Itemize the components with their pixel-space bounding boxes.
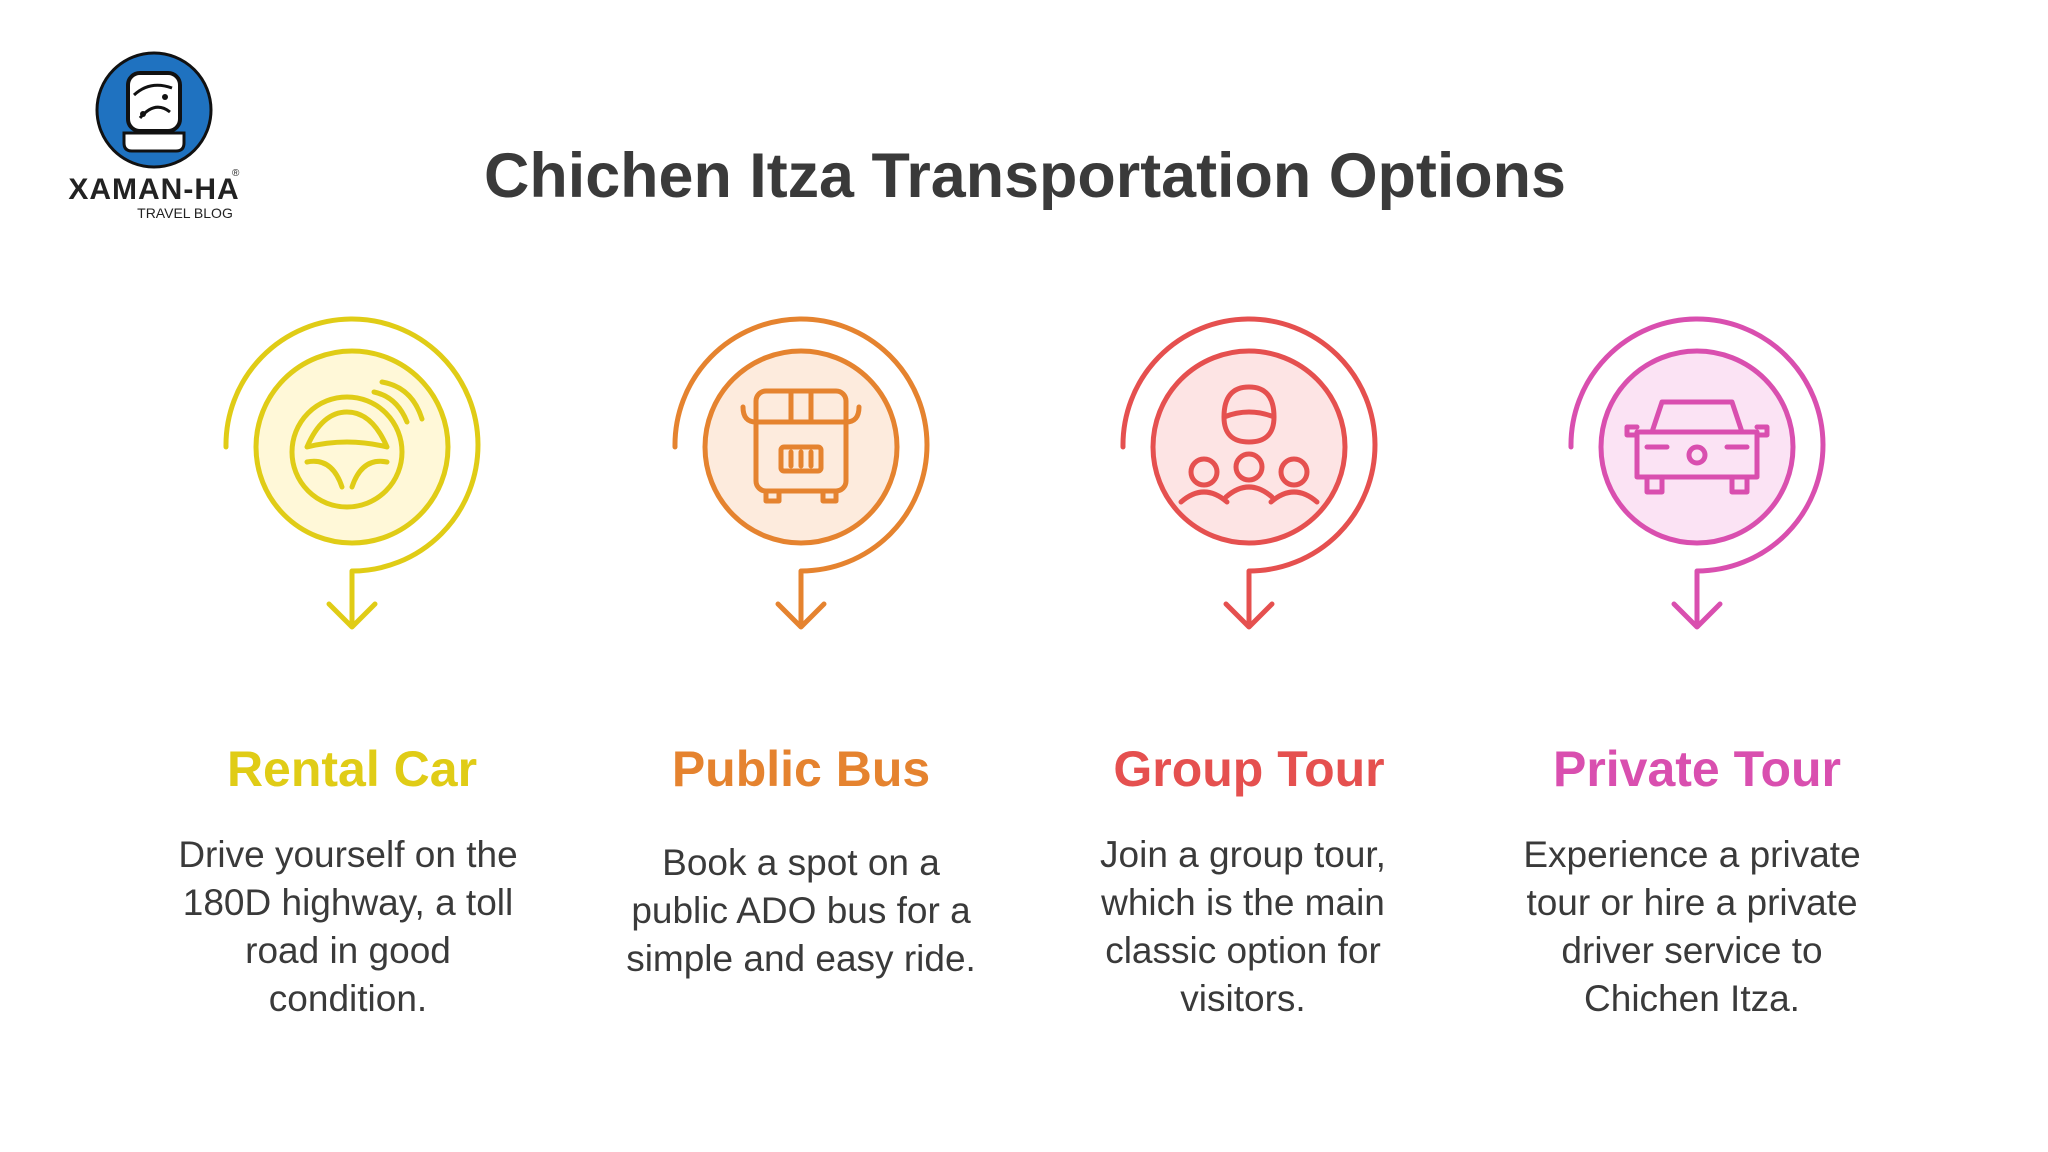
icon: steering wheel spiral [226,319,478,627]
text block: Chichen Itza. [1584,978,1800,1019]
column: Group Tour [1100,319,1386,1019]
title: Chichen Itza Transportation Options [484,141,1566,211]
column: Public Bus [626,319,976,979]
text block: Drive yourself on the [178,834,518,875]
heading: Public Bus [672,741,930,797]
text block: driver service to [1561,930,1823,971]
logo: XAMAN-HA [68,173,240,206]
text block: classic option for [1105,930,1381,971]
heading: Private Tour [1553,741,1841,797]
text block: which is the main [1100,882,1385,923]
text block: Join a group tour, [1100,834,1386,875]
text block: 180D highway, a toll [183,882,513,923]
heading: Rental Car [227,741,477,797]
text block: road in good [245,930,451,971]
column: Rental Car [178,319,518,1019]
text block: visitors. [1180,978,1306,1019]
text block: condition. [269,978,427,1019]
icon: bus spiral [675,319,927,627]
text block: Book a spot on a [662,842,940,883]
text block: tour or hire a private [1526,882,1858,923]
icon: group spiral [1123,319,1375,627]
heading: Group Tour [1113,741,1385,797]
column: Private Tour [1523,319,1861,1019]
logo [68,53,240,221]
icon: car spiral [1571,319,1823,627]
logo: ® [232,168,240,179]
text block: Experience a private [1523,834,1861,875]
logo: TRAVEL BLOG [137,205,233,221]
text block: public ADO bus for a [631,890,971,931]
text block: simple and easy ride. [626,938,976,979]
